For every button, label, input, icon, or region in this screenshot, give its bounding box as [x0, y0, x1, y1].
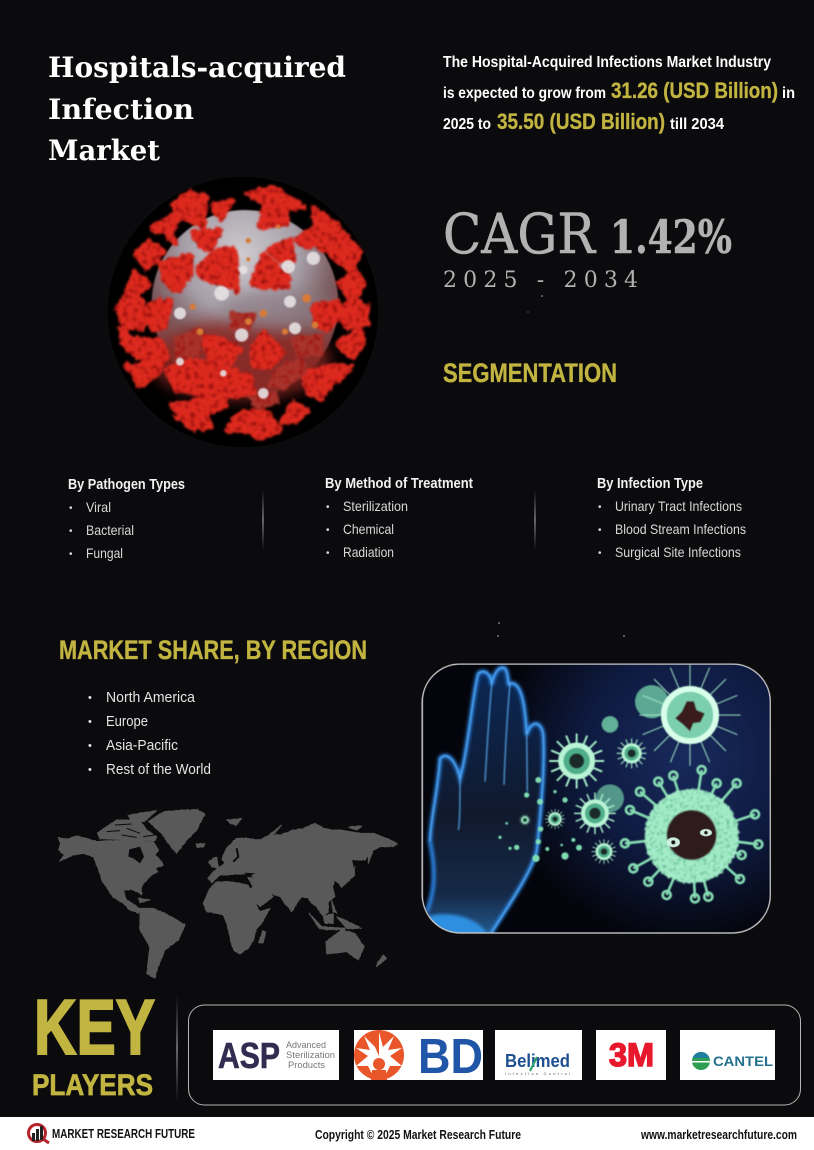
column: by pathogen types: •	[69, 526, 73, 537]
title: Market	[48, 134, 160, 167]
hand	[427, 668, 544, 935]
heading: key players: KEY	[34, 983, 155, 1071]
logo: Belimed: Belimed	[505, 1051, 570, 1071]
region list: •	[88, 716, 92, 728]
region list: •	[88, 692, 92, 704]
heading: key players: PLAYERS	[32, 1069, 153, 1102]
column: by method of treatment: •	[326, 548, 330, 559]
logo: 3M	[596, 1030, 666, 1080]
title	[48, 51, 346, 167]
column: by method of treatment: •	[326, 525, 330, 536]
panel: company logos	[188, 1005, 800, 1105]
CAGR figure	[443, 202, 732, 293]
large virus	[621, 766, 762, 902]
column: by pathogen types: Viral	[86, 499, 111, 515]
column: by method of treatment: Radiation	[343, 544, 394, 560]
panel: segmentation lists	[68, 475, 746, 561]
footer	[0, 1117, 814, 1150]
region list	[88, 689, 211, 778]
column: by pathogen types: Bacterial	[86, 522, 134, 538]
logo: BD: BD	[418, 1030, 483, 1084]
intro text: market growth: 2025 to	[443, 116, 491, 133]
intro text: market growth: The Hospital-Acquired Infections Market Industry	[443, 54, 771, 71]
column: by method of treatment: •	[326, 502, 330, 513]
column: by infection type: Surgical Site Infections	[615, 544, 741, 560]
column: by infection type: •	[598, 525, 602, 536]
intro text: market growth: till 2034	[670, 116, 724, 133]
region list: Europe	[106, 713, 148, 730]
column: by method of treatment: Chemical	[343, 521, 394, 537]
intro text: market growth: is expected to grow from	[443, 85, 606, 102]
column: by pathogen types	[68, 476, 185, 561]
region list: Rest of the World	[106, 761, 211, 778]
title: Hospitals-acquired	[48, 51, 346, 84]
logo: Cantel	[680, 1030, 775, 1080]
intro text: market growth: 31.26 (USD Billion)	[611, 78, 778, 103]
column: by pathogen types: By Pathogen Types	[68, 476, 185, 493]
CAGR figure: CAGR	[443, 202, 596, 266]
region list: •	[88, 764, 92, 776]
logo: ASP	[213, 1030, 339, 1080]
logo: Belimed	[495, 1030, 582, 1080]
region list: North America	[106, 689, 196, 706]
column: by infection type	[597, 475, 746, 560]
column: by pathogen types: Fungal	[86, 545, 123, 561]
region list: •	[88, 740, 92, 752]
column: by method of treatment	[325, 475, 473, 560]
image: hand stopping viruses	[422, 664, 770, 935]
world map	[58, 809, 397, 978]
heading: market share by region: MARKET SHARE, BY REGION	[59, 635, 367, 665]
footer: MARKET RESEARCH FUTURE	[52, 1126, 195, 1141]
intro text: market growth: in	[782, 85, 795, 102]
logo: Belimed: Infection Control	[505, 1071, 570, 1076]
heading: segmentation: SEGMENTATION	[443, 358, 617, 388]
CAGR figure: 2025 - 2034	[443, 268, 638, 293]
region list: Asia-Pacific	[106, 737, 178, 754]
column: by infection type: Urinary Tract Infections	[615, 498, 742, 514]
logo: 3M: 3M	[609, 1037, 654, 1073]
logo: BD	[354, 1030, 483, 1084]
small particles	[498, 777, 582, 862]
heading: key players	[32, 983, 155, 1102]
column: by pathogen types: •	[69, 503, 73, 514]
column: by infection type: •	[598, 502, 602, 513]
logo: ASP: ASP	[218, 1035, 280, 1076]
logo: ASP: Products	[288, 1060, 325, 1071]
column: by method of treatment: By Method of Treatment	[325, 475, 473, 492]
logo: ASP: Advanced	[286, 1040, 326, 1051]
logo: ASP: Sterilization	[286, 1050, 335, 1061]
logo: Cantel: CANTEL	[713, 1053, 773, 1069]
column: by infection type: Blood Stream Infections	[615, 521, 746, 537]
column: by method of treatment: Sterilization	[343, 498, 408, 514]
viruses	[519, 664, 741, 864]
footer: Copyright © 2025 Market Research Future	[315, 1127, 521, 1142]
intro text: market growth: 35.50 (USD Billion)	[497, 109, 665, 134]
column: by pathogen types: •	[69, 549, 73, 560]
column: by infection type: By Infection Type	[597, 475, 703, 492]
icon: market research future logo	[28, 1124, 49, 1143]
column: by infection type: •	[598, 548, 602, 559]
icon: red coronavirus	[108, 177, 378, 447]
intro text: market growth	[443, 54, 795, 134]
title: Infection	[48, 93, 194, 126]
CAGR figure: 1.42%	[610, 210, 732, 264]
